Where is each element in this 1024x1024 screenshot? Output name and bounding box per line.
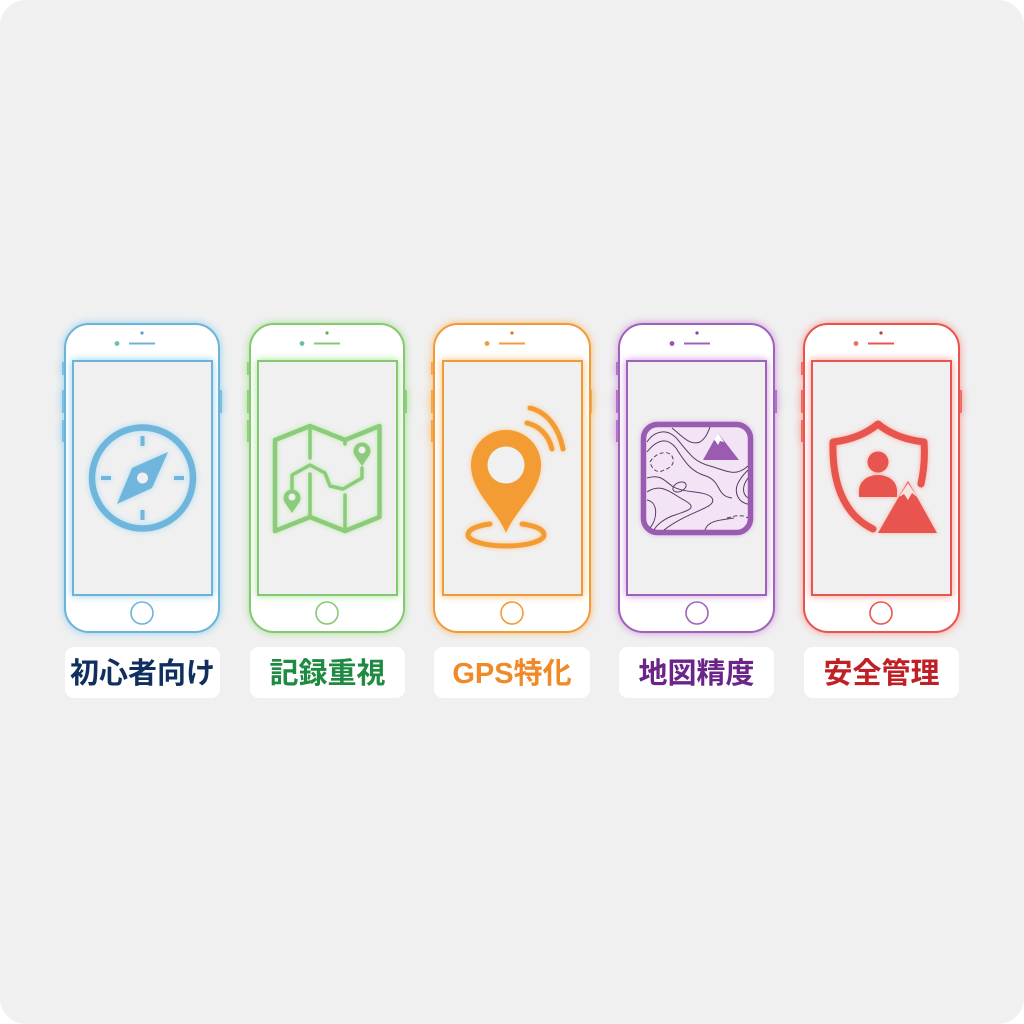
phone 5: safety, red: [801, 324, 962, 632]
icon: folded map with route: [275, 426, 380, 531]
label: GPS: GPS特化: [452, 657, 572, 690]
label: records: [250, 647, 405, 698]
label: safety: 安全管理: [823, 657, 940, 690]
label: map accuracy: 地図精度: [638, 657, 755, 690]
label: safety: [804, 647, 959, 698]
label: map accuracy: [619, 647, 774, 698]
icon: GPS pin with signal: [468, 408, 563, 546]
icon: topographic map: [644, 424, 750, 532]
phone 2: records, green: [247, 324, 407, 632]
label: beginner: 初心者向け: [70, 657, 215, 690]
icon: compass: [92, 428, 193, 528]
label: records: 記録重視: [269, 657, 386, 690]
phone 4: map accuracy, purple: [616, 324, 777, 632]
icon: shield, person and mountain: [833, 424, 937, 533]
label: beginner: [65, 647, 220, 698]
phone 1: beginner, blue: [62, 324, 222, 632]
phone 3: GPS, orange: [431, 324, 592, 632]
label: GPS: [434, 647, 590, 698]
